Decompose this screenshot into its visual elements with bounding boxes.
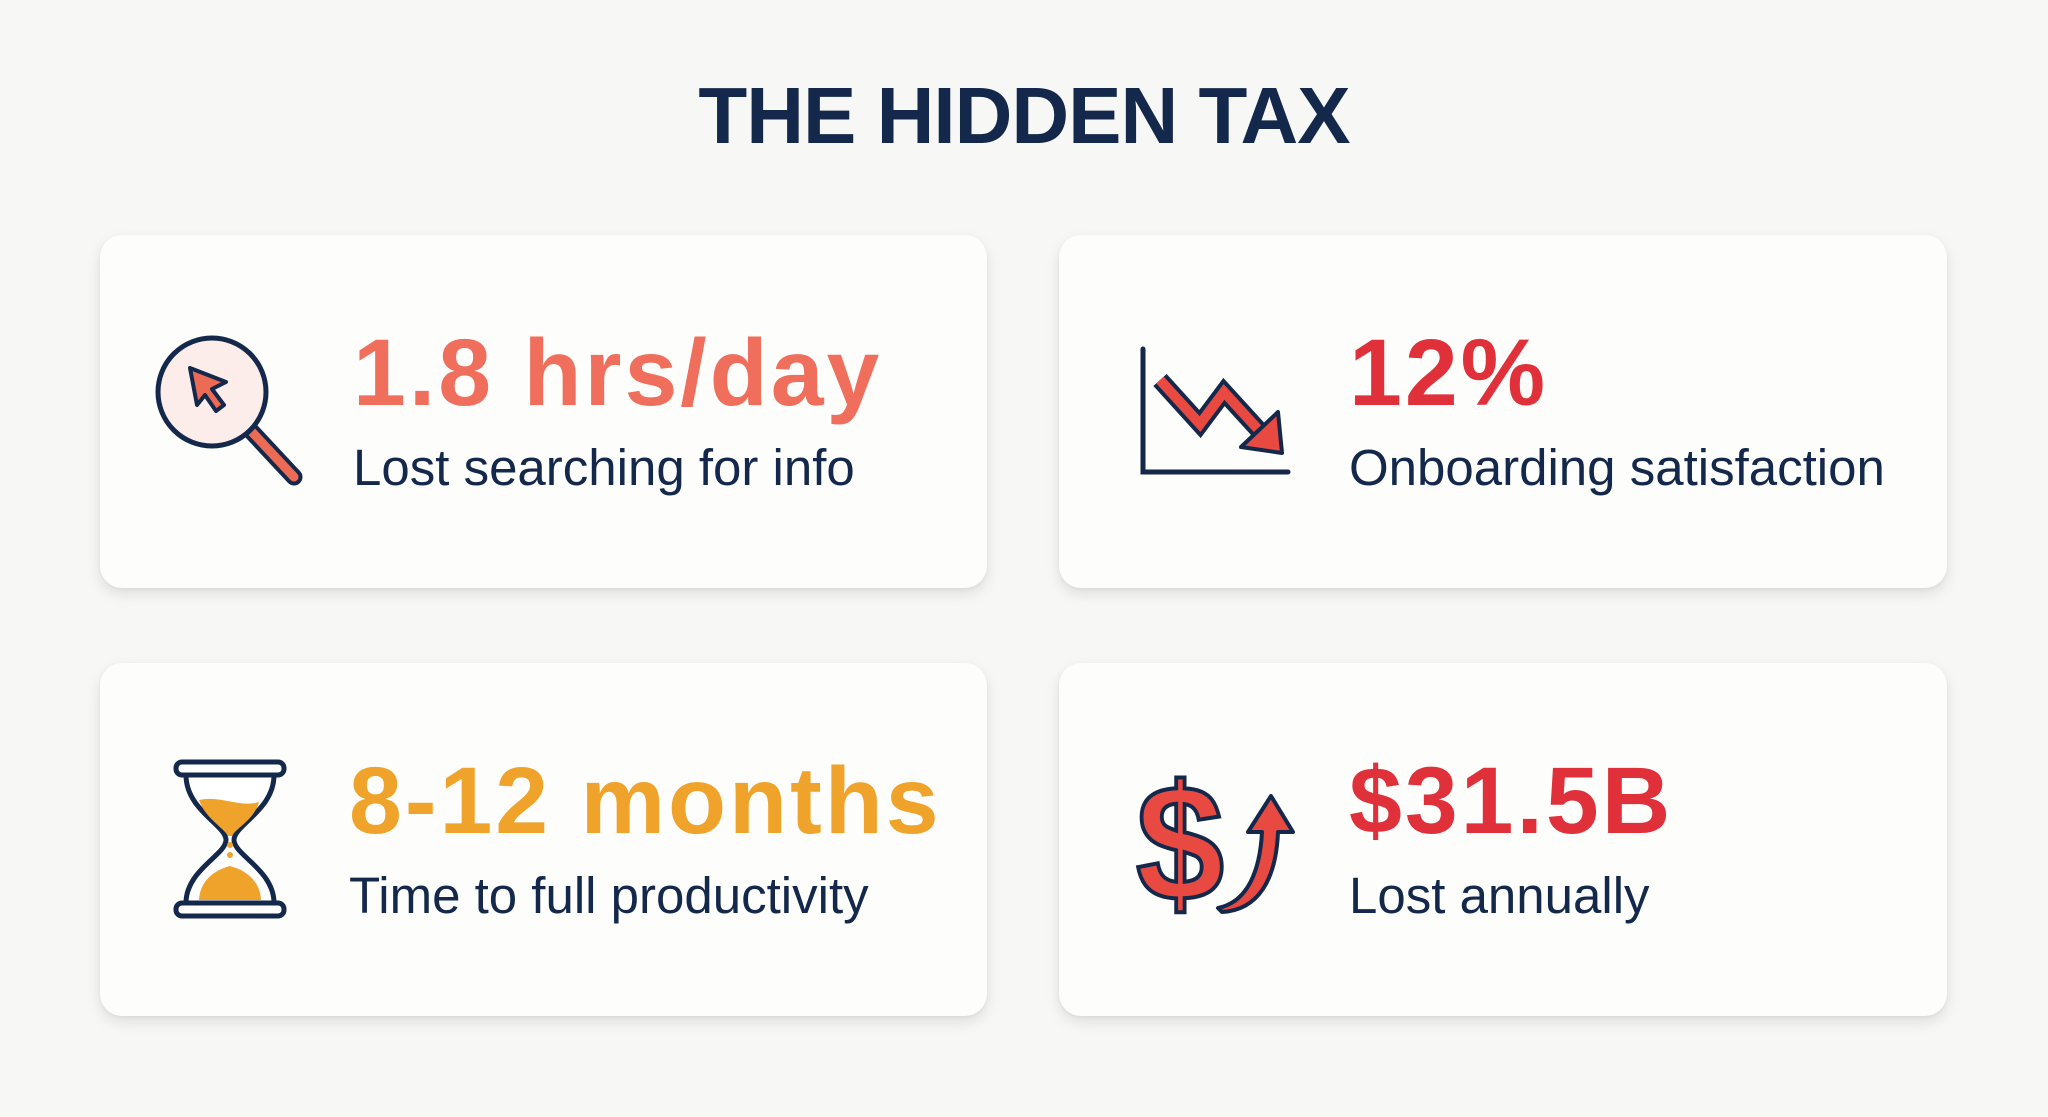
icon: declining chart — [1140, 346, 1290, 474]
stat value: 8-12 months — [349, 748, 942, 854]
panel: search time — [100, 235, 987, 588]
stat value: 1.8 hrs/day — [353, 320, 882, 426]
icon: magnifier — [156, 336, 302, 486]
stat label: Lost searching for info — [353, 439, 855, 496]
title: THE HIDDEN TAX — [698, 71, 1350, 160]
stat label: Lost annually — [1349, 867, 1650, 924]
icon: dollar with arrow: $ — [1136, 751, 1224, 935]
stat value: 12% — [1349, 320, 1548, 426]
panel: time to productivity — [100, 663, 987, 1016]
panel: annual loss — [1059, 663, 1947, 1016]
icon: dollar with arrow — [1136, 751, 1296, 935]
icon: hourglass — [174, 760, 286, 918]
stat value: $31.5B — [1349, 748, 1673, 854]
stat label: Onboarding satisfaction — [1349, 439, 1885, 496]
stat label: Time to full productivity — [349, 867, 869, 924]
panel: onboarding satisfaction — [1059, 235, 1947, 588]
